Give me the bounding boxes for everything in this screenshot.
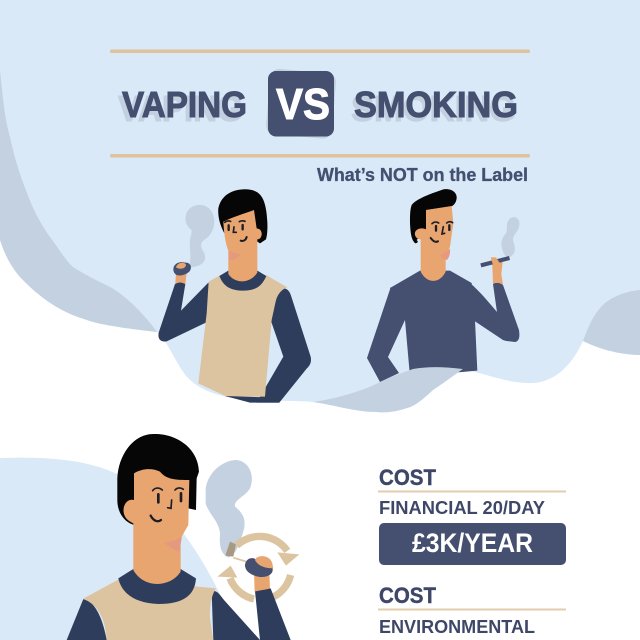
- title rule top: [110, 50, 530, 53]
- hand and cigarette: [480, 256, 510, 285]
- hand and device: [173, 262, 191, 284]
- sweater body: [390, 271, 477, 377]
- blush: [164, 537, 182, 552]
- figure: large vaping man: [67, 434, 299, 640]
- label: financial: FINANCIAL 20/DAY: [379, 498, 545, 518]
- collar: [118, 569, 196, 604]
- title: vaping: VAPING: [122, 84, 247, 125]
- eyes, nose and mouth: [431, 222, 453, 242]
- background: grey left wave: [0, 70, 157, 332]
- smoke: [206, 460, 252, 558]
- collar: [219, 271, 266, 291]
- blush: [228, 251, 241, 260]
- background: grey right blob: [583, 290, 640, 355]
- vest: [198, 275, 287, 397]
- eyes, nose and mouth: [225, 221, 247, 241]
- raised arm: [67, 591, 260, 640]
- hair: [218, 189, 267, 243]
- value box: [379, 523, 566, 565]
- figure: smoking man: [367, 189, 519, 382]
- background: middle grey blob: [313, 367, 463, 412]
- icon: circular arrows: [217, 536, 299, 599]
- stat panel: financial cost: £3K/YEAR: [412, 528, 533, 558]
- right arm: [470, 283, 519, 342]
- vest: [83, 579, 216, 640]
- icon: vapour cloud: [185, 205, 214, 267]
- hair: [117, 434, 199, 525]
- title: smoking: SMOKING: [354, 84, 518, 125]
- device tip: [225, 542, 236, 557]
- heading: cost: COST: [379, 465, 437, 490]
- neck and face: [415, 206, 453, 281]
- badge: VS: [265, 68, 337, 139]
- badge: VS: VS: [276, 80, 330, 129]
- left arm: [158, 282, 212, 342]
- figure: vaping man: [158, 189, 311, 403]
- smoke: [501, 217, 519, 257]
- hair: [410, 189, 457, 243]
- hand and device: [245, 556, 273, 592]
- blush: [440, 248, 450, 260]
- title rule bottom: [110, 154, 530, 158]
- left arm: [367, 287, 405, 382]
- eyes, nose and mouth: [151, 488, 183, 521]
- title: vaping: VAPING: [118, 88, 243, 129]
- background: lower left blue shape: [0, 458, 240, 640]
- neck and face: [223, 210, 262, 281]
- waist shadow: [225, 396, 279, 403]
- label: environmental: ENVIRONMENTAL: [379, 617, 535, 637]
- stat panel: financial cost: [378, 465, 566, 565]
- title: smoking: SMOKING: [351, 88, 516, 129]
- neck and face: [124, 469, 189, 584]
- heading: cost: COST: [379, 583, 437, 608]
- stat panel: environmental cost: [378, 583, 566, 637]
- background: light blue top area: [0, 0, 640, 412]
- subtitle: What’s NOT on the Label: [317, 165, 528, 185]
- right arm: [257, 289, 311, 403]
